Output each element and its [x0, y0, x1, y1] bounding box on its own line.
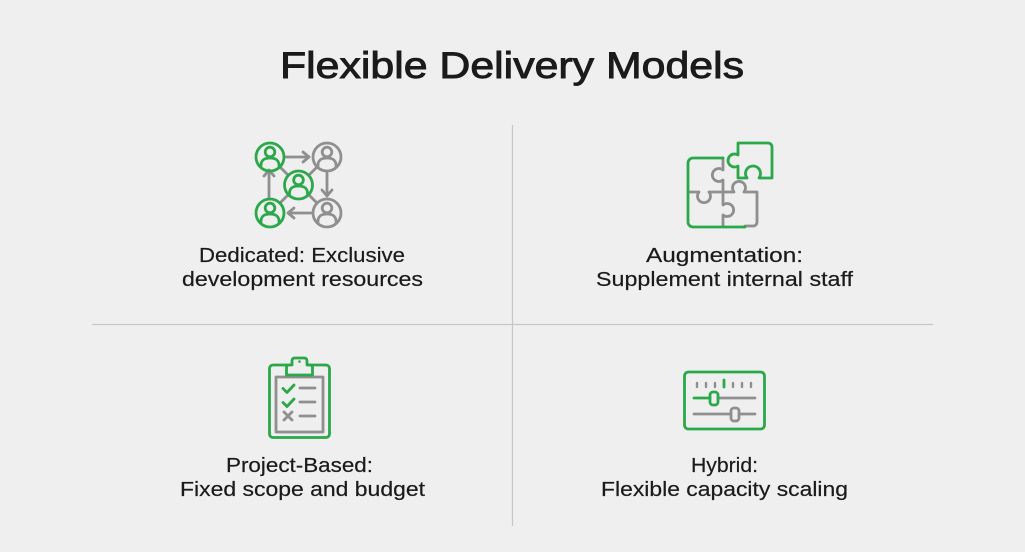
- label: augmentation: Supplement internal staff: [596, 268, 853, 291]
- label: project-based: Fixed scope and budget: [180, 478, 425, 501]
- title: Flexible Delivery Models: [280, 45, 744, 86]
- panel: hybrid: [601, 372, 848, 501]
- icon: puzzle pieces: [688, 143, 772, 227]
- label: project-based: [180, 454, 425, 501]
- icon: clipboard checklist: [270, 358, 330, 438]
- label: dedicated: development resources: [182, 268, 423, 291]
- label: hybrid: Flexible capacity scaling: [601, 478, 848, 501]
- label: augmentation: [596, 244, 853, 291]
- panel: project-based: [180, 358, 425, 501]
- label: hybrid: [601, 454, 848, 501]
- icon: connected people network: [256, 143, 341, 227]
- label: dedicated: [182, 244, 423, 291]
- label: project-based: Project-Based:: [226, 454, 373, 477]
- icon: sliders control panel: [684, 372, 764, 429]
- panel: dedicated: [182, 143, 423, 291]
- label: dedicated: Dedicated: Exclusive: [199, 244, 405, 267]
- panel: augmentation: [596, 143, 853, 291]
- label: augmentation: Augmentation:: [646, 244, 803, 267]
- label: hybrid: Hybrid:: [691, 454, 758, 477]
